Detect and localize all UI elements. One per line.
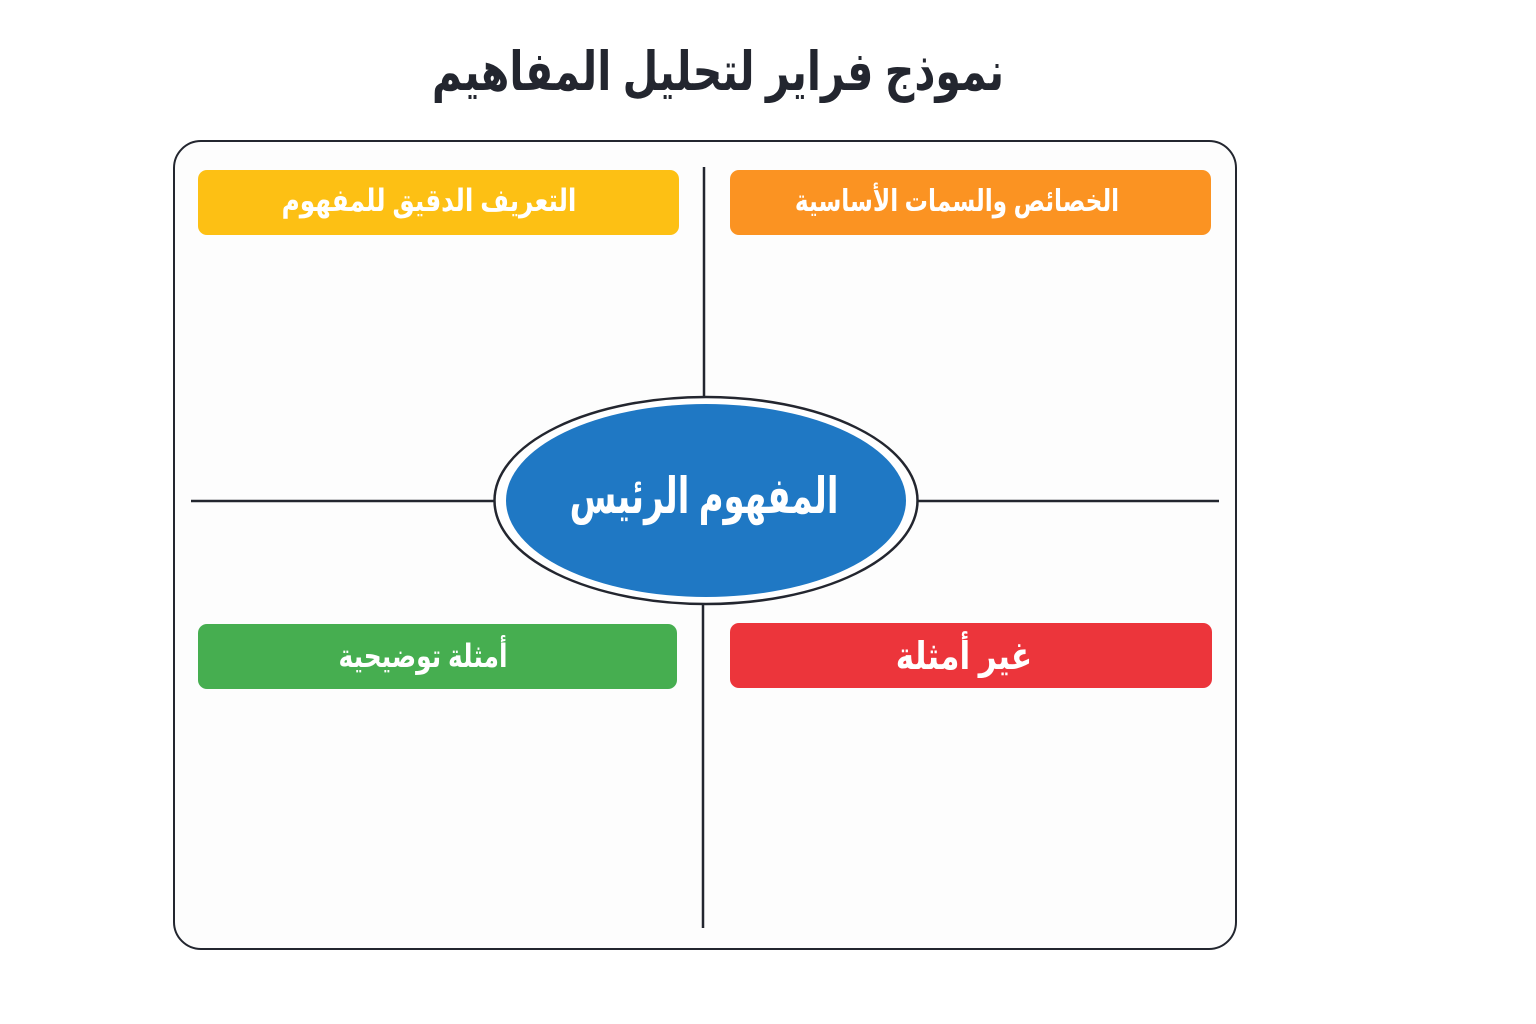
panel: frayer model frame (173, 140, 1237, 950)
label: examples: أمثلة توضيحية (338, 638, 508, 674)
header: definition (198, 170, 679, 235)
label: definition: التعريف الدقيق للمفهوم (282, 183, 576, 218)
header: examples (198, 624, 677, 689)
title: نموذج فراير لتحليل المفاهيم (432, 42, 1004, 102)
label: non-examples: غير أمثلة (895, 636, 1032, 678)
header: non-examples (730, 623, 1212, 688)
label: characteristics: الخصائص والسمات الأساسية (794, 185, 1119, 218)
header: characteristics (730, 170, 1211, 235)
diagram lines and center: المفهوم الرئيس (570, 468, 838, 526)
